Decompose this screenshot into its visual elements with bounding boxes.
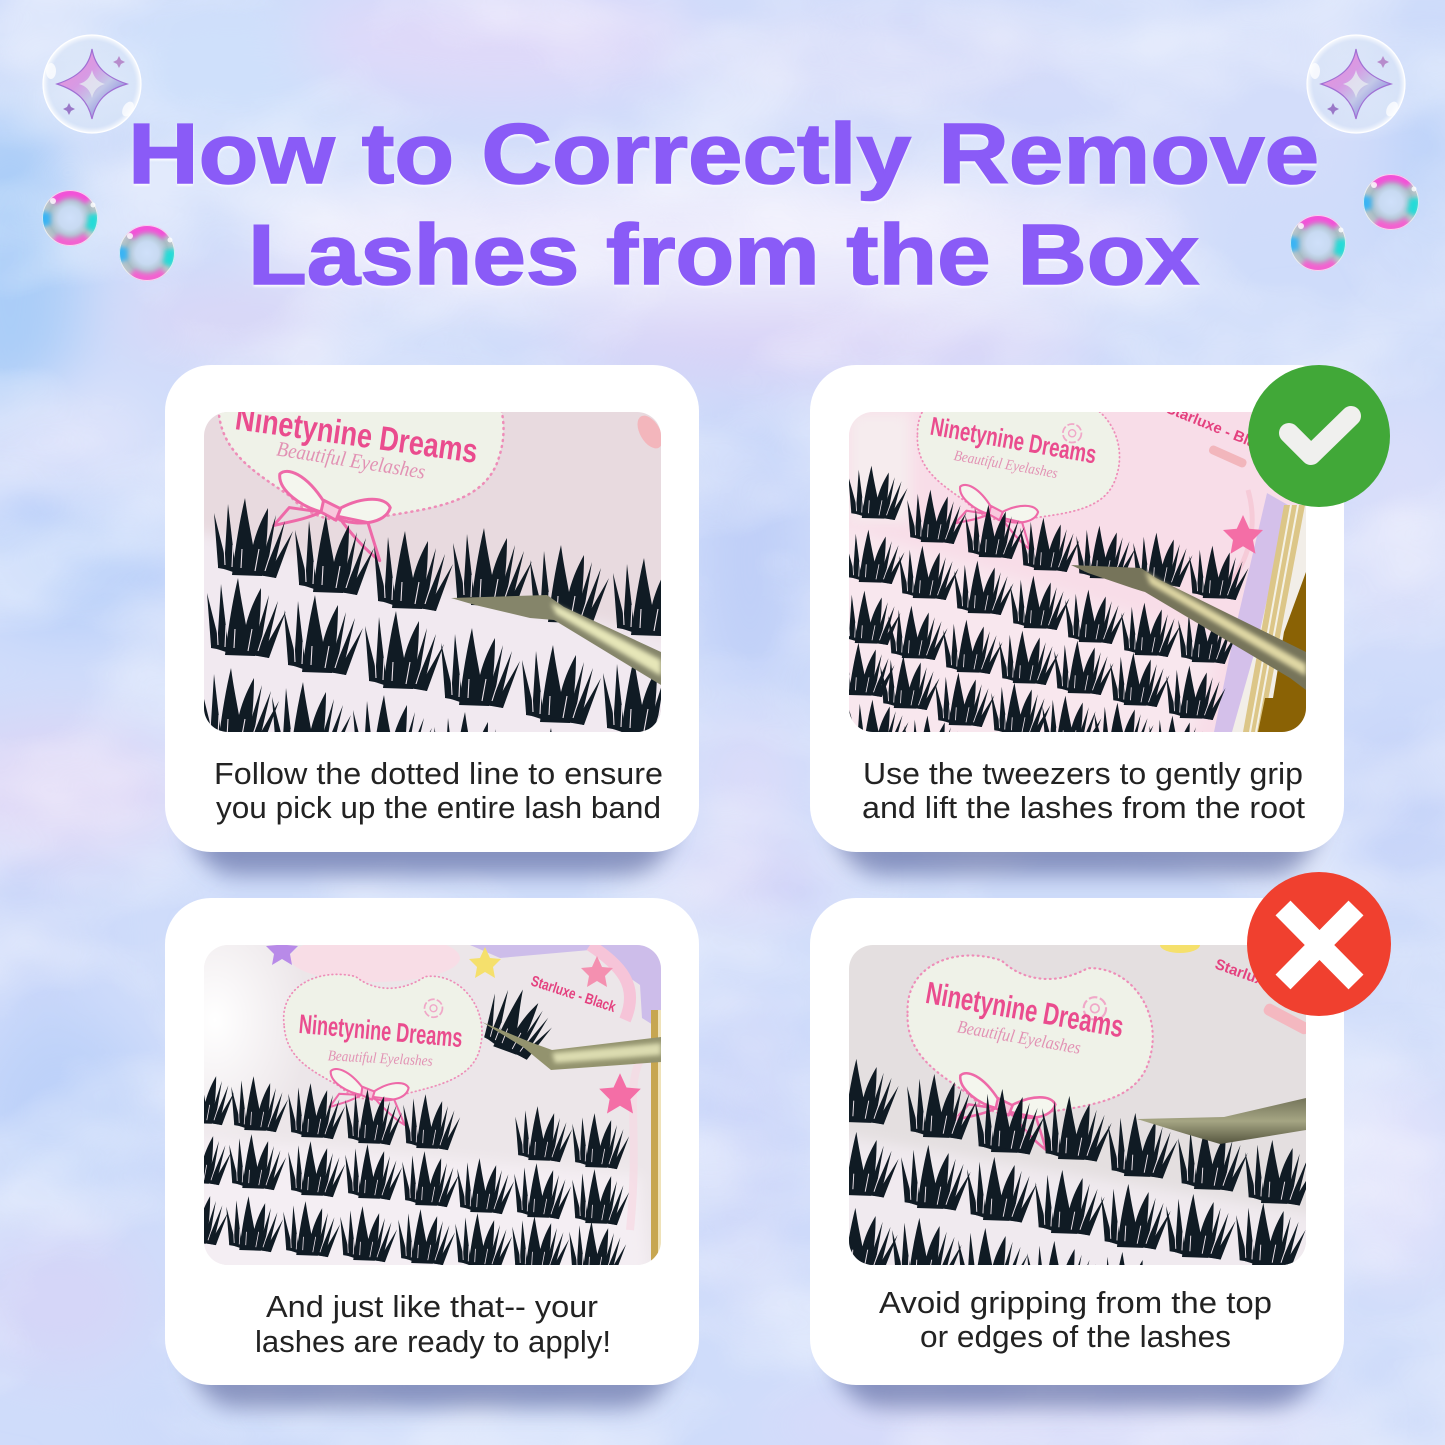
photo: tweezers gripping lash tips: Starluxe - Black [1213,956,1325,1010]
photo: tweezers gripping lash tips: Beautiful Eyelashes [956,1016,1082,1058]
photo: full tray with tweezers [849,412,1306,732]
panel: step 1, follow the dotted line [165,320,699,875]
caption: Avoid gripping from the top [879,1285,1272,1320]
caption: Use the tweezers to gently grip [863,756,1303,791]
photo: lashes on the tray with tweezers: Ninetynine Dreams [233,399,480,471]
caption: Follow the dotted line to ensure [214,756,663,791]
caption: And just like that-- your [266,1289,598,1324]
title [128,107,1319,303]
photo: tweezers gripping lash tips: Ninetynine Dreams [923,975,1126,1044]
decorative bubble: star top left [43,35,141,133]
caption [862,756,1305,825]
caption: and lift the lashes from the root [862,790,1305,825]
photo: tweezers gripping lash tips [849,945,1306,1265]
photo: full tray with tweezers: Starluxe - Black [1164,400,1275,458]
photo: single lash lifted from the tray: Beautiful Eyelashes [327,1048,433,1070]
caption: or edges of the lashes [920,1319,1231,1354]
iridescent bubble left 2 [119,225,175,281]
panel: step 3, ready to apply [120,890,699,1408]
iridescent bubble left 1 [42,190,98,246]
caption: lashes are ready to apply! [255,1324,611,1359]
caption: you pick up the entire lash band [216,790,661,825]
caption [255,1289,611,1359]
iridescent bubble right 1 [1363,174,1419,230]
photo: single lash lifted from the tray: Starluxe - Black [529,973,618,1016]
iridescent bubble right 2 [1290,215,1346,271]
photo: single lash lifted from the tray [204,945,661,1265]
photo: lashes on the tray with tweezers: Beautiful Eyelashes [275,437,427,484]
panel: step 2, grip with tweezers [810,365,1390,875]
photo: full tray with tweezers: Beautiful Eyelashes [953,448,1059,482]
panel: step 4, avoid gripping from the top [810,872,1391,1408]
photo: lashes on the tray with tweezers [204,412,661,732]
title: Lashes from the Box [248,208,1199,303]
icon: green check badge [1248,365,1390,507]
photo: single lash lifted from the tray: Ninetynine Dreams [298,1009,464,1053]
caption [214,756,663,825]
decorative bubble: star top right [1307,35,1405,133]
icon: red cross badge [1247,872,1391,1016]
title: How to Correctly Remove [128,107,1319,202]
photo: full tray with tweezers: Ninetynine Dreams [928,411,1099,469]
caption [879,1285,1272,1354]
